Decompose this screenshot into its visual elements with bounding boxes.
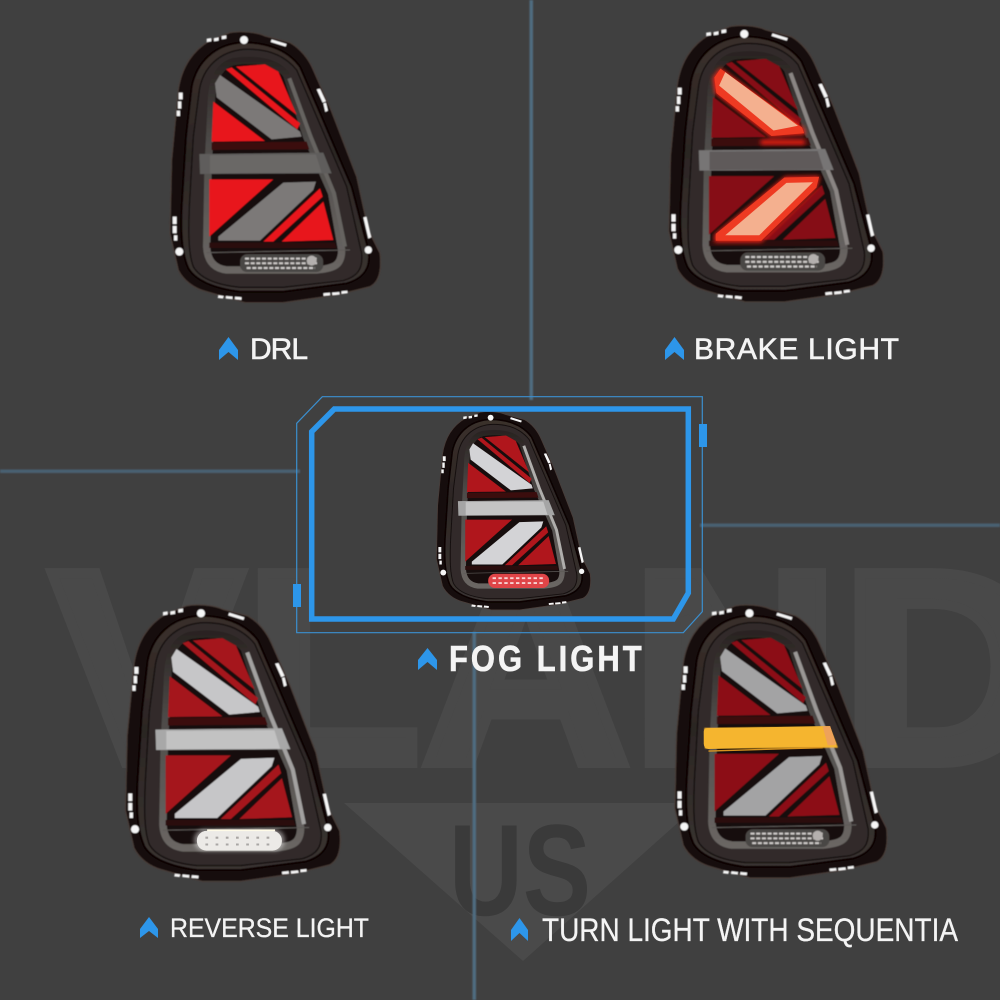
icon: chevron — [219, 337, 238, 360]
bulb: lit red fog lens — [488, 574, 549, 588]
lamp: DRL — [170, 32, 381, 303]
icon: chevron — [140, 917, 158, 938]
lamp: reverse light — [126, 605, 340, 881]
icon: chevron — [665, 337, 684, 360]
lamp: fog light — [436, 412, 591, 610]
lamp: turn light — [675, 605, 887, 878]
bulb: idle reverse lens — [745, 829, 829, 847]
label: DRL — [219, 333, 308, 366]
label: DRL: DRL — [250, 333, 308, 366]
bulb: idle reverse lens — [740, 252, 825, 271]
lamp: brake light — [669, 26, 884, 302]
watermark: shield with US — [344, 797, 700, 961]
amber sequential bar — [704, 726, 836, 751]
watermark: VLAND: VLAND — [50, 514, 1000, 822]
brake glow bars — [713, 68, 820, 242]
label: reverse light: REVERSE LIGHT — [170, 913, 369, 943]
icon: chevron — [418, 648, 437, 670]
label: fog light: FOG LIGHT — [449, 640, 642, 680]
bulb: idle reverse lens — [240, 254, 323, 272]
frame: fog light highlight — [293, 397, 707, 633]
icon: chevron — [511, 918, 528, 941]
label: brake light: BRAKE LIGHT — [694, 333, 899, 366]
watermark: shield with US: US — [449, 797, 591, 943]
bulb: lit white reverse lens — [194, 830, 285, 851]
